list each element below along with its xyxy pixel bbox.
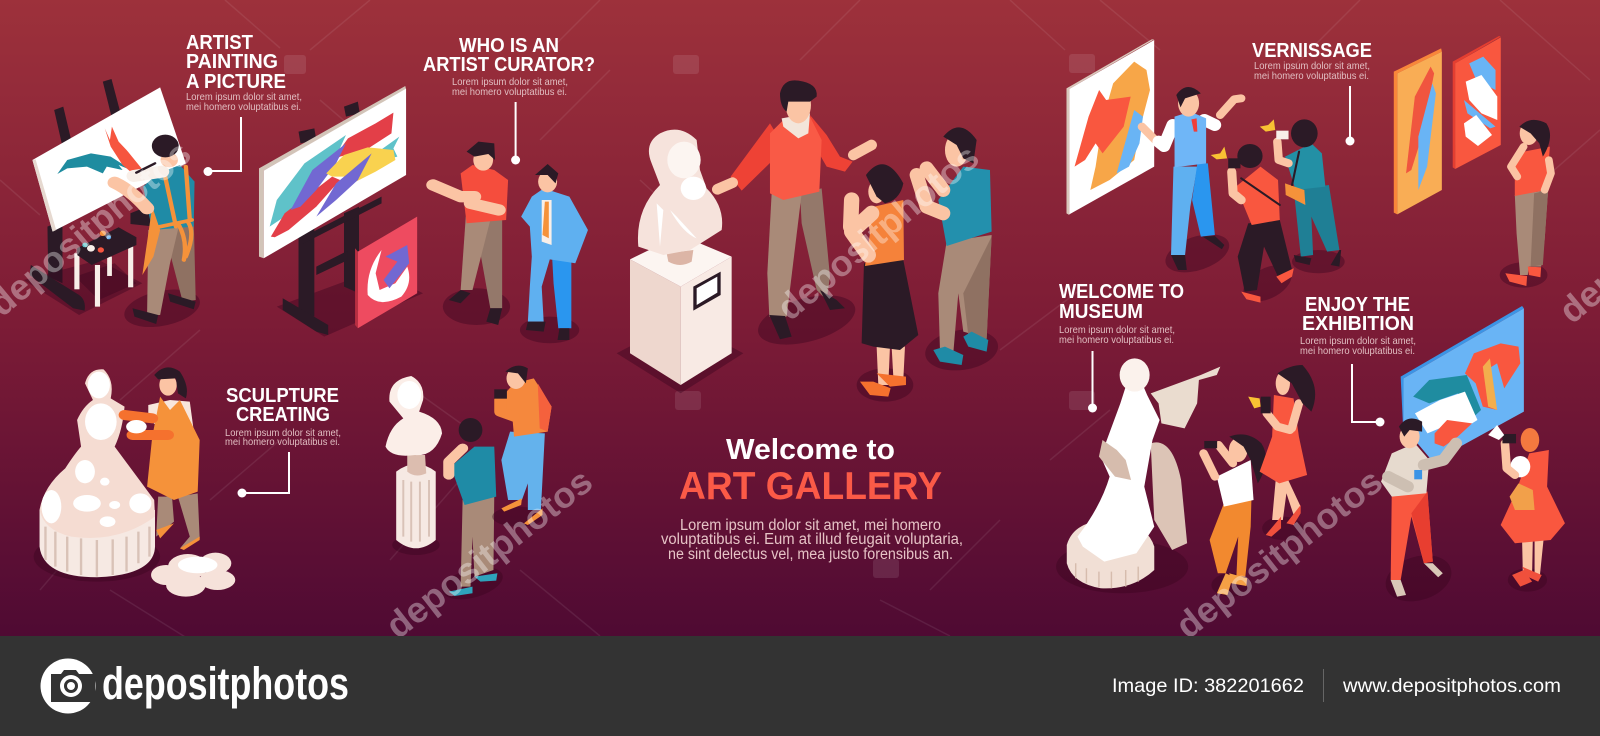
heading: welcome to museum: WELCOME TO [1059,281,1184,303]
scene: vernissage [1066,36,1551,309]
figure: photographer in red [1211,144,1298,309]
logo wordmark: depositphotos [102,658,349,709]
watermark text: depositphotos [378,460,600,646]
figure: woman with camera in white top [1204,434,1266,597]
sculpture: statue on cylinder base [34,369,160,582]
figure: visitor in teal [437,418,508,606]
picture: red painting with swirl [355,217,417,328]
figure: woman in red dress photographing painting [1488,425,1565,592]
footer bar [0,636,1600,736]
watermark text: depositphotos [1168,460,1390,646]
callout line: curator [511,102,520,164]
heading: artist painting a picture: mei homero voluptatibus ei. [186,101,301,113]
easel: curator's easel [277,102,423,337]
heading: artist painting a picture: ARTIST [186,32,253,54]
heading: welcome to museum [1059,281,1184,346]
sculpture: draped woman statue [1056,358,1220,593]
heading: who is an artist curator: Lorem ipsum dolor sit amet, [452,76,568,88]
heading: vernissage: VERNISSAGE [1252,40,1372,62]
intro paragraph: Lorem ipsum dolor sit amet, mei homero [680,517,941,534]
heading: vernissage: mei homero voluptatibus ei. [1254,70,1369,82]
callout line: museum [1088,351,1097,412]
callout line: vernissage [1346,86,1354,146]
sculpture: bust on column [386,376,442,555]
figure: man in blue suit [520,164,588,343]
figure: sculptor woman in orange apron [125,367,200,550]
figure: woman viewing paintings [1500,120,1551,288]
canvas: artist's painting in progress [32,87,186,232]
painting: blue canvas with swirls [1401,306,1524,462]
heading: welcome to museum: mei homero voluptatibus ei. [1059,334,1174,346]
pedestal with label [617,235,743,393]
figure: woman in red dress with camera [1248,365,1315,540]
figure: curator in red [433,142,510,325]
heading: sculpture creating: SCULPTURE [226,385,339,407]
figure: photographer in teal with orange bag [1260,119,1345,273]
scene: curator presenting bust to visitors [617,80,1001,402]
website url: www.depositphotos.com [1342,675,1561,697]
heading: enjoy the exhibition: EXHIBITION [1302,313,1414,335]
figure: guide with lanyard [1379,418,1458,609]
heading: who is an artist curator: WHO IS AN [459,35,559,57]
figure: photographer in orange [492,366,552,527]
watermark text: depositphotos [769,136,987,328]
heading: artist painting a picture [186,32,302,113]
figure: presenter in blue waistcoat [1142,87,1241,280]
heading: who is an artist curator: mei homero voluptatibus ei. [452,86,567,98]
heading: artist painting a picture: PAINTING [186,51,278,73]
clay pile [151,553,235,597]
title: welcome to art gallery: Welcome to [726,434,895,466]
figure: curator in red sweater [717,80,872,354]
intro paragraph: voluptatibus ei. Eum at illud feugait voluptaria, [661,531,963,548]
heading: sculpture creating: Lorem ipsum dolor sit amet, [225,427,341,439]
title: welcome to art gallery: ART GALLERY [679,465,942,508]
heading: sculpture creating: CREATING [236,404,330,426]
image id: Image ID: 382201662 [1112,675,1304,697]
heading: vernissage: Lorem ipsum dolor sit amet, [1254,60,1370,72]
heading: vernissage [1252,40,1372,82]
heading: welcome to museum: MUSEUM [1059,301,1143,323]
heading: enjoy the exhibition: ENJOY THE [1305,294,1410,316]
heading: enjoy the exhibition [1300,294,1416,357]
heading: artist painting a picture: A PICTURE [186,71,286,93]
heading: sculpture creating [225,385,341,448]
table with paints [74,227,136,307]
icon: depositphotos logo [40,658,96,714]
heading: enjoy the exhibition: mei homero voluptatibus ei. [1300,345,1415,357]
sculpture: bearded bust [638,130,722,265]
painting: white canvas with red, orange and blue [1066,39,1154,215]
heading: welcome to museum: Lorem ipsum dolor sit amet, [1059,324,1175,336]
figure: woman in orange top and black skirt [851,164,918,402]
watermark text [0,132,1600,646]
scene: sculpture creating and bust visitors [34,366,552,606]
paintings: orange and red canvases [1394,36,1501,214]
heading: enjoy the exhibition: Lorem ipsum dolor sit amet, [1300,335,1416,347]
callout line: artist [204,117,241,176]
heading: sculpture creating: mei homero voluptatibus ei. [225,436,340,448]
scene: welcome to museum and enjoy the exhibition [1056,306,1565,609]
scene: artist painting a picture and curator [24,79,588,343]
callout line: exhibition [1352,364,1384,426]
easel: artist's easel back posts and feet [24,79,155,315]
heading: who is an artist curator [423,35,595,98]
intro paragraph [661,517,963,563]
heading: artist painting a picture: Lorem ipsum dolor sit amet, [186,91,302,103]
title: welcome to art gallery [679,434,942,508]
canvas: abstract painting on easel [259,86,406,258]
figure: man in teal clapping [917,127,1001,375]
figure: artist painting [115,135,205,333]
heading: who is an artist curator: ARTIST CURATOR? [423,54,595,76]
intro paragraph: ne sint delectus vel, mea justo forensibus an. [668,546,953,563]
callout line: sculpture [238,452,289,498]
